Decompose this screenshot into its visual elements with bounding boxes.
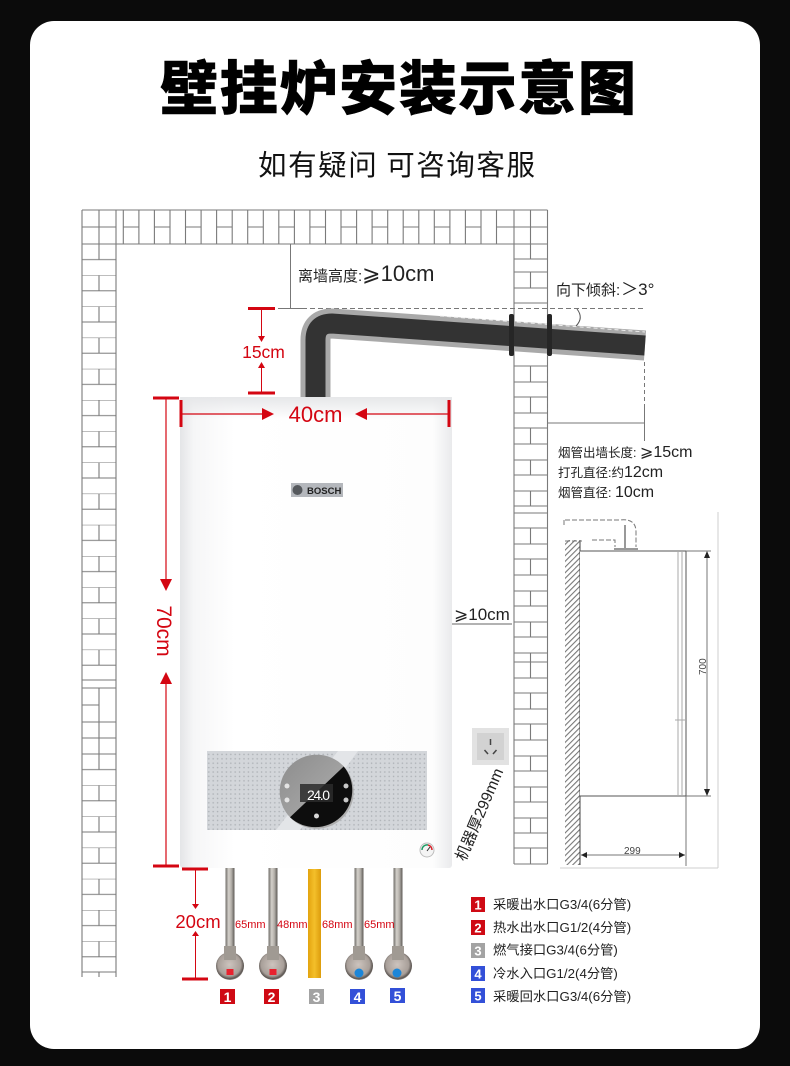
side-view technical drawing: 700 <box>698 658 709 675</box>
legend item 5: 5 <box>474 988 482 1004</box>
flue length dimension <box>548 355 644 441</box>
legend item 1: 采暖出水口G3/4(6分管) <box>493 897 631 912</box>
side-view technical drawing <box>560 512 718 868</box>
legend item 3: 3 <box>474 944 482 958</box>
label: flue specs <box>558 444 692 501</box>
control panel strip <box>207 751 427 830</box>
control dial <box>280 755 354 829</box>
label: flue specs: 烟管直径: 10cm <box>558 484 654 501</box>
dimension: 15cm: 15cm <box>242 342 285 362</box>
dimension: 20cm <box>175 869 221 979</box>
boiler logo: BOSCH <box>291 483 343 497</box>
pipe spacing labels: 65mm <box>364 919 395 931</box>
legend item 5: 采暖回水口G3/4(6分管) <box>493 989 631 1004</box>
pipe number badges: 2 <box>268 989 276 1005</box>
angle arc <box>576 309 580 326</box>
flue pipe <box>316 316 645 397</box>
label: machine thickness: 机器厚299mm <box>452 766 507 864</box>
legend item 4: 4 <box>474 966 482 982</box>
label: wall clearance: 离墙高度:⩾10cm <box>298 261 434 286</box>
brick wall: top <box>116 210 514 244</box>
legend item 2: 热水出水口G1/2(4分管) <box>493 920 631 935</box>
legend item 2: 2 <box>474 920 482 936</box>
icon: wall socket <box>472 728 509 765</box>
legend item 4: 冷水入口G1/2(4分管) <box>493 966 618 981</box>
pipe spacing labels <box>235 919 395 931</box>
dimension: 40cm <box>181 400 449 427</box>
label: downward slope: 向下倾斜:＞3° <box>556 280 654 299</box>
icon: valves <box>216 946 412 980</box>
legend item 3: 燃气接口G3/4(6分管) <box>493 942 618 958</box>
boiler body <box>180 397 452 868</box>
pipe number badges: 3 <box>313 989 321 1005</box>
subtitle: 如有疑问 可咨询客服 <box>258 143 535 184</box>
dimension: 70cm <box>152 398 179 866</box>
legend <box>471 897 631 1004</box>
side-view technical drawing: 299 <box>624 846 641 857</box>
icon: pressure gauge <box>420 843 434 857</box>
pipe number badges <box>220 988 405 1005</box>
pipe number badges: 5 <box>394 988 402 1004</box>
brick wall: left <box>82 210 116 977</box>
label: side clearance: ⩾10cm <box>454 605 510 624</box>
pipe spacing labels: 48mm <box>277 919 308 931</box>
flue wall collars <box>509 314 552 356</box>
legend item 1: 1 <box>474 898 482 912</box>
control dial: 24.0 <box>307 787 330 803</box>
pipe number badges: 1 <box>224 989 232 1005</box>
dimension: 15cm <box>242 308 285 393</box>
label: flue specs: 打孔直径:约12cm <box>558 464 663 481</box>
dimension: 20cm: 20cm <box>175 911 221 932</box>
pipe number badges: 4 <box>354 989 362 1005</box>
water pipes <box>226 868 402 978</box>
dimension: 70cm: 70cm <box>152 605 175 657</box>
label: flue specs: 烟管出墙长度: ⩾15cm <box>558 444 692 461</box>
clearance line: above flue <box>278 244 645 308</box>
brick wall: right <box>514 210 548 864</box>
title: 壁挂炉安装示意图 <box>160 42 636 126</box>
pipe spacing labels: 68mm <box>322 919 353 931</box>
boiler logo: BOSCH: BOSCH <box>307 486 341 497</box>
dimension: 40cm: 40cm <box>289 402 342 427</box>
pipe spacing labels: 65mm <box>235 919 266 931</box>
clearance line: right side <box>452 623 512 625</box>
